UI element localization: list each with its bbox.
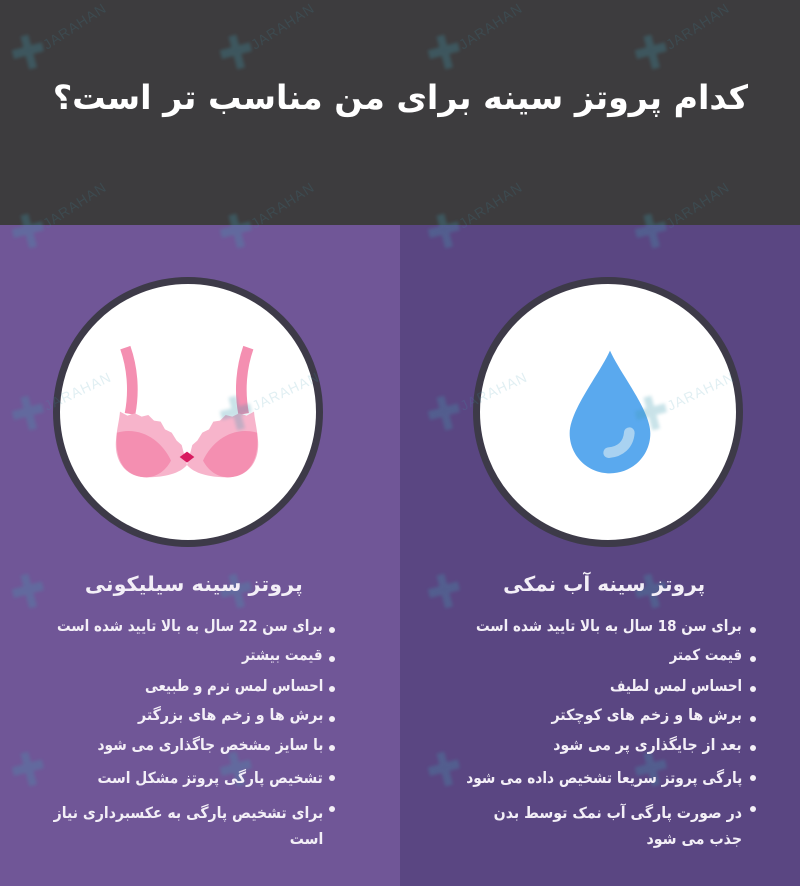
list item 3: احساس لمس لطیف — [610, 677, 742, 695]
watermark: repeated JARAHAN logos: JARAHAN — [665, 369, 737, 414]
list item 7: در صورت پارگی آب نمک توسط بدن — [494, 804, 742, 822]
watermark: repeated JARAHAN logos: JARAHAN — [40, 179, 109, 232]
list item 7 — [53, 804, 323, 848]
panel: saline column background — [400, 225, 800, 886]
watermark: repeated JARAHAN logos: JARAHAN — [458, 369, 530, 414]
watermark: repeated JARAHAN logos: JARAHAN — [663, 179, 732, 232]
list item 4: برش ها و زخم های کوچکتر — [552, 706, 742, 724]
watermark: repeated JARAHAN logos: JARAHAN — [42, 369, 114, 414]
list item 3: احساس لمس نرم و طبیعی — [145, 677, 323, 695]
bullets — [329, 627, 335, 812]
panel: saline text — [466, 572, 756, 848]
watermark: repeated JARAHAN logos: JARAHAN — [250, 369, 322, 414]
heading: saline: پروتز سینه آب نمکی — [503, 572, 705, 596]
list item 7: است — [289, 830, 323, 848]
watermark: repeated JARAHAN logos: JARAHAN — [248, 0, 317, 53]
list item 7: جذب می شود — [646, 830, 742, 848]
list item 6: تشخیص پارگی پروتز مشکل است — [98, 769, 323, 787]
list item 7: برای تشخیص پارگی به عکسبرداری نیاز — [53, 804, 323, 822]
list item 5: بعد از جایگذاری پر می شود — [554, 736, 742, 754]
panel: silicone column background — [0, 225, 400, 886]
list item 5: با سایز مشخص جاگذاری می شود — [97, 736, 323, 754]
heading: silicone: پروتز سینه سیلیکونی — [85, 572, 303, 596]
list item 2: قیمت بیشتر — [242, 646, 323, 664]
list item 6: پارگی پروتز سریعا تشخیص داده می شود — [466, 769, 742, 787]
list item 4: برش ها و زخم های بزرگتر — [138, 706, 323, 724]
watermark: repeated JARAHAN logos: JARAHAN — [40, 0, 109, 53]
list item 1: برای سن 22 سال به بالا تایید شده است — [57, 617, 323, 635]
list item 7 — [494, 803, 742, 848]
panel: header background — [0, 0, 800, 225]
watermark: repeated JARAHAN logos: JARAHAN — [456, 0, 525, 53]
list item 2: قیمت کمتر — [670, 646, 742, 664]
title: کدام پروتز سینه برای من مناسب تر است؟ — [53, 78, 748, 117]
list item 1: برای سن 18 سال به بالا تایید شده است — [476, 617, 742, 635]
bullets — [750, 627, 756, 812]
watermark: repeated JARAHAN logos: JARAHAN — [663, 0, 732, 53]
watermark: repeated JARAHAN logos: JARAHAN — [248, 179, 317, 232]
panel: silicone text — [53, 572, 335, 848]
watermark: repeated JARAHAN logos: JARAHAN — [456, 179, 525, 232]
